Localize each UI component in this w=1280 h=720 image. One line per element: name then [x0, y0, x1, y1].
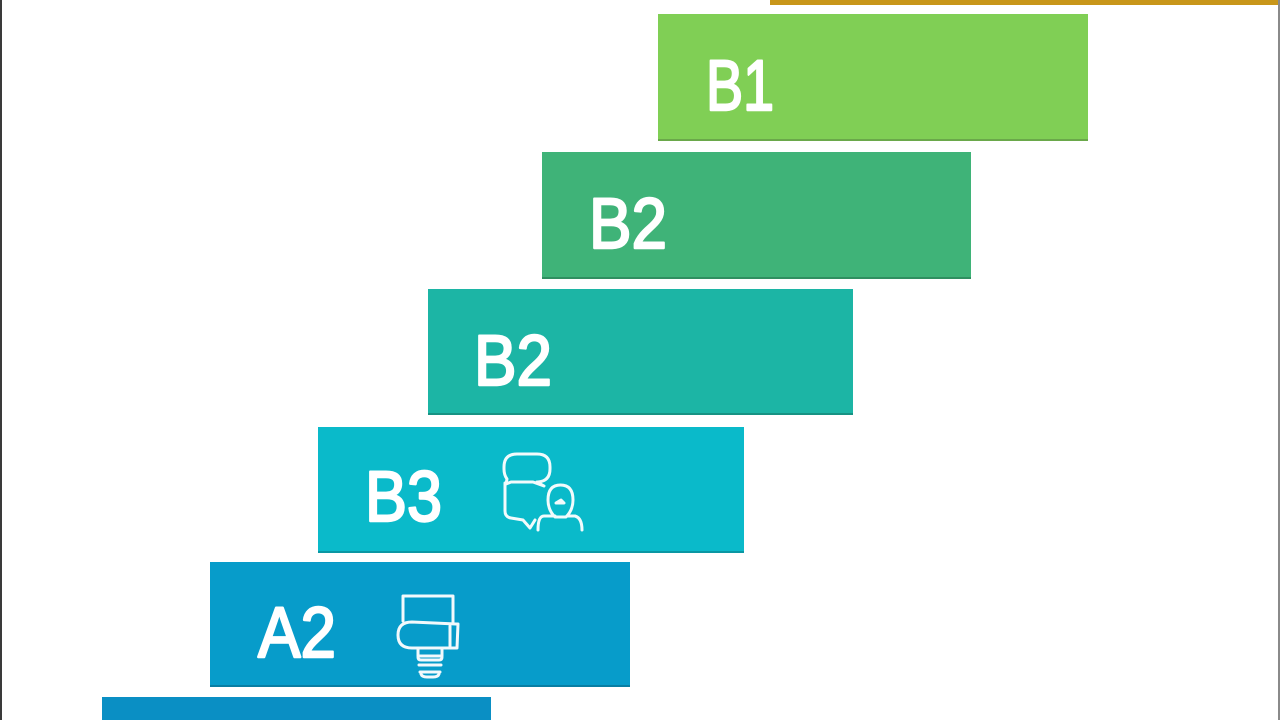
step: B3: [318, 427, 744, 553]
label: B1: B1: [706, 47, 774, 126]
label: B3: B3: [365, 458, 442, 537]
step: B2 upper: [542, 152, 971, 279]
step: B1: [658, 14, 1088, 141]
step: A2: [210, 562, 630, 687]
label: B2 upper: B2: [589, 185, 667, 264]
icon: speech bubbles and person: [504, 454, 582, 530]
icon: book light bulb: [398, 596, 458, 677]
label: B2 lower: B2: [474, 322, 552, 401]
step: B2 lower: [428, 289, 853, 415]
step: bottom partial bar: [102, 697, 491, 720]
top step: gold bar: [770, 0, 1278, 5]
label: A2: A2: [258, 594, 336, 673]
